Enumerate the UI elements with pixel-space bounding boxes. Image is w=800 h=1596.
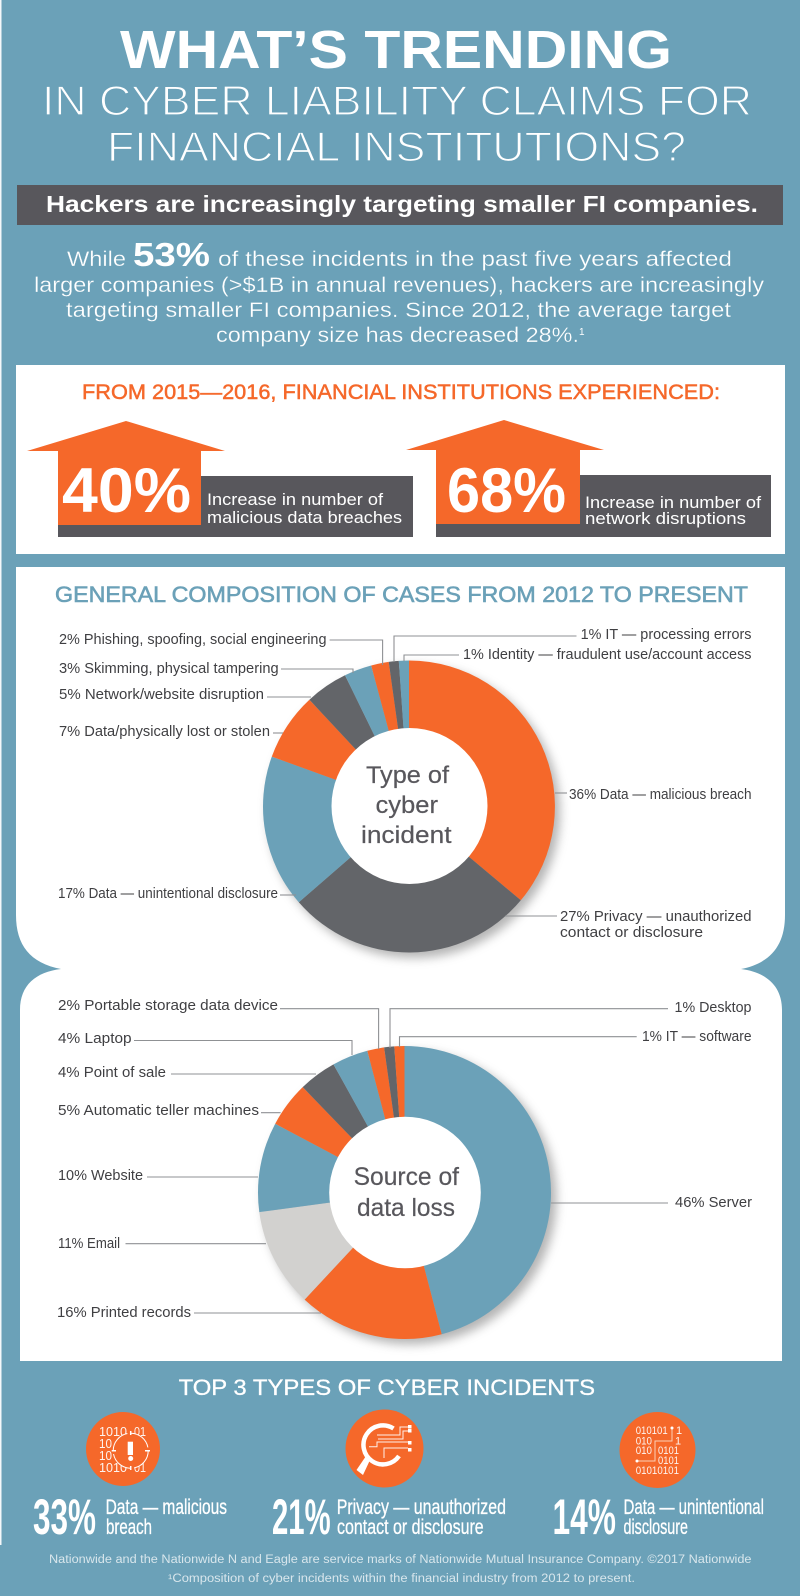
icon: magnifier with circuit lines [346, 1410, 424, 1488]
labels: type of cyber incident: contact or disclosure [560, 925, 703, 941]
stat: 33 percent [33, 1489, 227, 1545]
stat: 68 percent network disruptions: network disruptions [585, 509, 746, 528]
labels: source of data loss: 46% Server [675, 1195, 752, 1211]
panel: general composition of cases [16, 567, 785, 1361]
donut center label: data loss [357, 1194, 455, 1222]
footer notes: ¹Composition of cyber incidents within the financial industry from 2012 to present. [168, 1573, 635, 1585]
intro paragraph [34, 236, 765, 347]
icon: binary alert [86, 1412, 160, 1486]
icon: binary alert: 1010 [99, 1425, 127, 1439]
title: IN CYBER LIABILITY CLAIMS FOR [42, 77, 752, 124]
banner: hackers targeting smaller companies: Hackers are increasingly targeting smaller FI companies. [46, 191, 758, 217]
labels: source of data loss: 10% Website [58, 1168, 143, 1184]
icon: binary circuit: 0101 [658, 1455, 679, 1467]
stat: 40 percent malicious data breaches [27, 421, 413, 537]
stat: 33 percent: 33% [33, 1489, 96, 1545]
labels: source of data loss: 2% Portable storage data device [58, 998, 278, 1014]
labels: type of cyber incident: 1% IT — processing errors [581, 627, 752, 643]
stat: 21 percent: Privacy — unauthorized [337, 1496, 506, 1519]
labels: type of cyber incident: 5% Network/website disruption [59, 687, 264, 703]
footer notes [49, 1554, 752, 1585]
stat: 40 percent malicious data breaches: 40% [62, 456, 191, 526]
intro paragraph: of these incidents in the past five years affected [218, 248, 732, 271]
labels: source of data loss: 11% Email [58, 1236, 120, 1252]
labels: type of cyber incident: 17% Data — unintentional disclosure [58, 886, 278, 902]
labels: source of data loss [57, 998, 752, 1321]
intro paragraph: larger companies (>$1B in annual revenues), hackers are increasingly [34, 274, 765, 297]
donut center label: Type of [366, 762, 449, 789]
labels: type of cyber incident [58, 627, 752, 941]
icon: binary circuit: 01010101 [636, 1465, 679, 1477]
icon: binary circuit: 1 [676, 1425, 682, 1437]
footer notes: Nationwide and the Nationwide N and Eagle are service marks of Nationwide Mutual Insurance Company. ©2017 Nationwide [49, 1554, 752, 1566]
donut center label [361, 762, 452, 849]
stat: 33 percent: breach [106, 1516, 152, 1539]
intro paragraph: While [67, 248, 126, 271]
stat: 68 percent network disruptions: 68% [447, 456, 566, 526]
labels: source of data loss: 1% IT — software [642, 1029, 752, 1045]
title: FINANCIAL INSTITUTIONS? [107, 123, 686, 170]
labels: type of cyber incident: 27% Privacy — unauthorized [560, 909, 752, 925]
stat: 21 percent: 21% [272, 1489, 331, 1545]
icon: binary alert: 01 [134, 1461, 146, 1475]
stat: 68 percent network disruptions: Increase in number of [585, 493, 761, 512]
labels: type of cyber incident: 2% Phishing, spoofing, social engineering [59, 632, 326, 648]
icon: binary circuit: 0101 [658, 1445, 679, 1457]
icon: binary circuit: 010101 [636, 1425, 668, 1437]
icon: binary circuit [620, 1412, 696, 1488]
donut center label [354, 1163, 459, 1222]
icon: binary circuit: 010 [636, 1445, 652, 1457]
labels: type of cyber incident: 1% Identity — fraudulent use/account access [463, 647, 752, 663]
labels: type of cyber incident: 3% Skimming, physical tampering [59, 661, 279, 677]
labels: source of data loss: 1% Desktop [674, 1000, 752, 1016]
icon: binary alert: 01 [134, 1425, 146, 1439]
icon: binary circuit: 1 [675, 1435, 681, 1447]
donut center label: Source of [354, 1163, 459, 1191]
stat: 40 percent malicious data breaches: malicious data breaches [207, 508, 402, 527]
stat: 21 percent: contact or disclosure [337, 1516, 484, 1539]
panel heading: FROM 2015—2016, FINANCIAL INSTITUTIONS EXPERIENCED: [82, 381, 720, 404]
labels: type of cyber incident: 36% Data — malicious breach [569, 787, 752, 803]
donut chart: type of cyber incident [263, 660, 560, 958]
banner: hackers targeting smaller companies [17, 185, 783, 225]
intro paragraph: 53% [133, 236, 210, 273]
stat: 21 percent [272, 1489, 506, 1545]
stat: 14 percent: 14% [552, 1489, 616, 1545]
intro paragraph: 1 [579, 327, 585, 338]
donut center label: incident [361, 822, 452, 849]
intro paragraph: company size has decreased 28%. [216, 324, 579, 347]
title [42, 20, 752, 170]
stat: 14 percent: disclosure [624, 1516, 688, 1539]
stat: 33 percent: Data — malicious [106, 1496, 227, 1519]
icon: binary alert: 10 [99, 1449, 112, 1463]
heading: general composition: GENERAL COMPOSITION OF CASES FROM 2012 TO PRESENT [55, 582, 748, 607]
donut center label: cyber [376, 792, 438, 819]
icon: binary alert: 1010 [99, 1461, 127, 1475]
heading: top 3 types: TOP 3 TYPES OF CYBER INCIDENTS [179, 1375, 595, 1400]
stat: 68 percent network disruptions [406, 420, 771, 537]
panel: 2015-2016 increases [16, 365, 785, 554]
stat: 40 percent malicious data breaches: Increase in number of [207, 490, 383, 509]
icon: binary alert: 10 [99, 1437, 112, 1451]
icon: binary circuit: 010 [636, 1435, 652, 1447]
donut chart: source of data loss [258, 1046, 556, 1344]
labels: type of cyber incident: 7% Data/physically lost or stolen [59, 724, 270, 740]
labels: source of data loss: 16% Printed records [57, 1305, 191, 1321]
intro paragraph: targeting smaller FI companies. Since 2012, the average target [66, 299, 731, 322]
labels: source of data loss: 4% Point of sale [58, 1065, 166, 1081]
stat: 14 percent [552, 1489, 764, 1545]
title: WHAT’S TRENDING [120, 20, 672, 80]
labels: source of data loss: 4% Laptop [58, 1031, 132, 1047]
labels: source of data loss: 5% Automatic teller machines [58, 1103, 259, 1119]
